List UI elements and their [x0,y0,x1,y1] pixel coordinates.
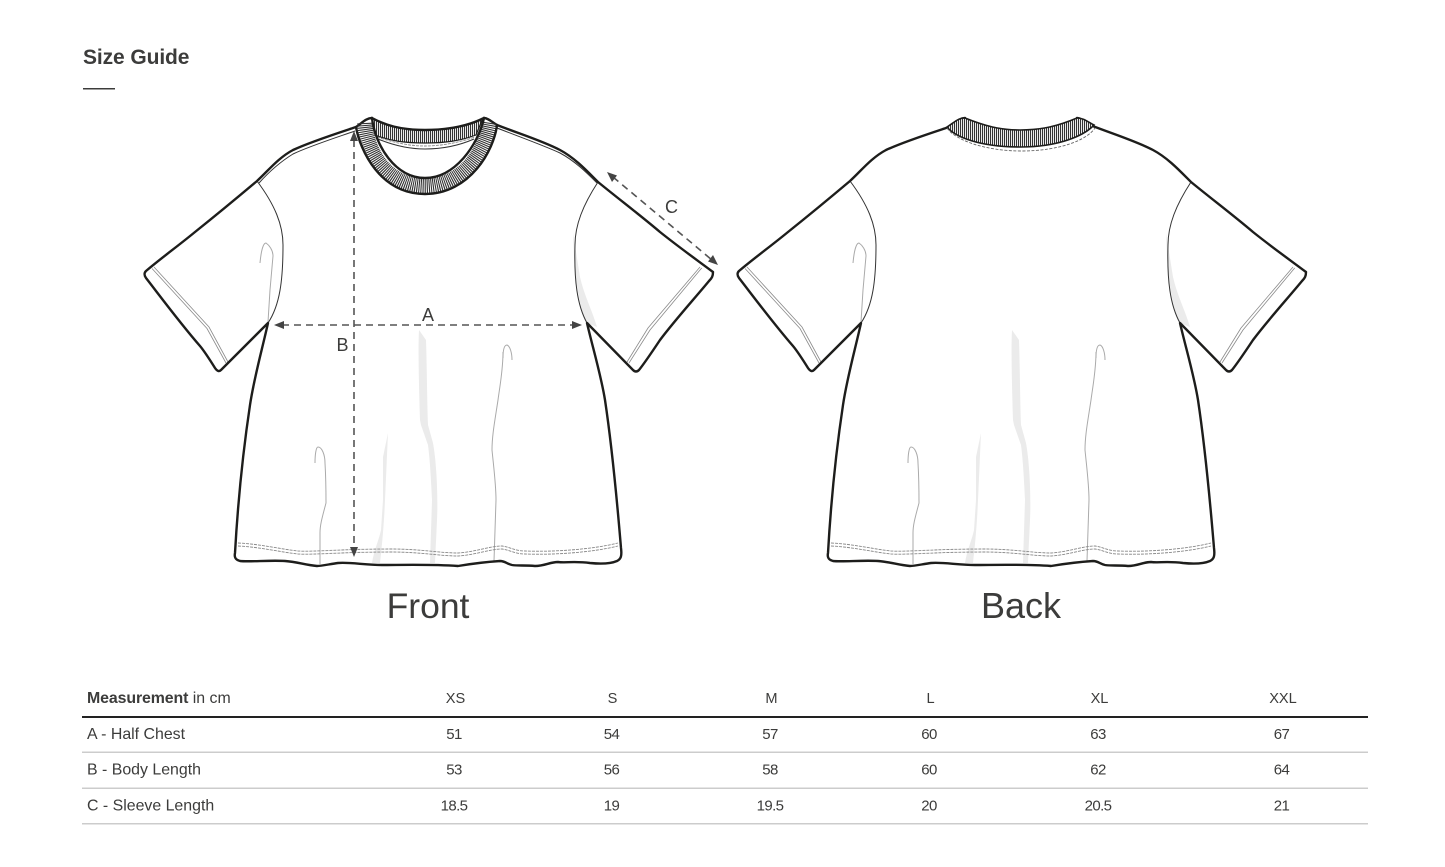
row: body length: 62 [1090,762,1106,778]
row: sleeve length: C - Sleeve Length [87,798,214,814]
row: sleeve length: 20 [921,798,937,814]
title: Size Guide [83,46,189,69]
table header: XS [446,691,465,707]
label: Back: Back [981,585,1062,626]
dimension C arrow [607,172,718,265]
table header: Measurement in cm [87,690,231,707]
label: Front: Front [387,586,470,626]
back t-shirt drawing [738,118,1306,566]
row: half chest: 54 [604,726,619,743]
row: body length: 64 [1274,762,1289,778]
row: half chest: 57 [762,726,778,743]
row: sleeve length: 18.5 [441,798,468,814]
dimension B arrow [336,131,358,557]
row: sleeve length [87,798,1289,814]
row: body length: 56 [604,762,619,778]
table header: L [926,691,935,707]
row: body length: B - Body Length [87,762,201,778]
size table [82,690,1368,824]
table header [87,690,1297,707]
front neck rib [365,122,490,186]
table header: S [608,691,618,707]
table header: M [765,691,778,707]
title underline [83,88,115,90]
table header: XL [1091,691,1108,707]
front t-shirt drawing [144,118,713,566]
row: half chest [87,726,1289,743]
dimension C arrow: C [665,197,678,217]
back neck rib [372,118,483,143]
row: body length [87,762,1289,778]
row: body length: 60 [921,762,937,778]
back neck stitching [947,128,1095,151]
row: half chest: 67 [1274,726,1289,743]
neck inner stitching [378,139,474,149]
row: body length: 53 [446,762,462,778]
shoulder stitching [259,128,597,183]
neck rib outlines [356,118,497,194]
row: sleeve length: 20.5 [1085,798,1112,814]
row: body length: 58 [762,762,778,778]
dimension A arrow [274,305,582,329]
row: sleeve length: 19 [604,798,619,814]
row: sleeve length: 21 [1274,798,1289,814]
row: half chest: 51 [446,726,462,743]
back neck rib [947,118,1094,147]
row: half chest: 60 [921,726,937,743]
row: half chest: A - Half Chest [87,726,186,743]
row: half chest: 63 [1090,726,1106,743]
row: sleeve length: 19.5 [757,798,784,814]
dimension B arrow: B [336,335,349,355]
dimension A arrow: A [422,305,434,325]
table header: XXL [1269,691,1297,707]
